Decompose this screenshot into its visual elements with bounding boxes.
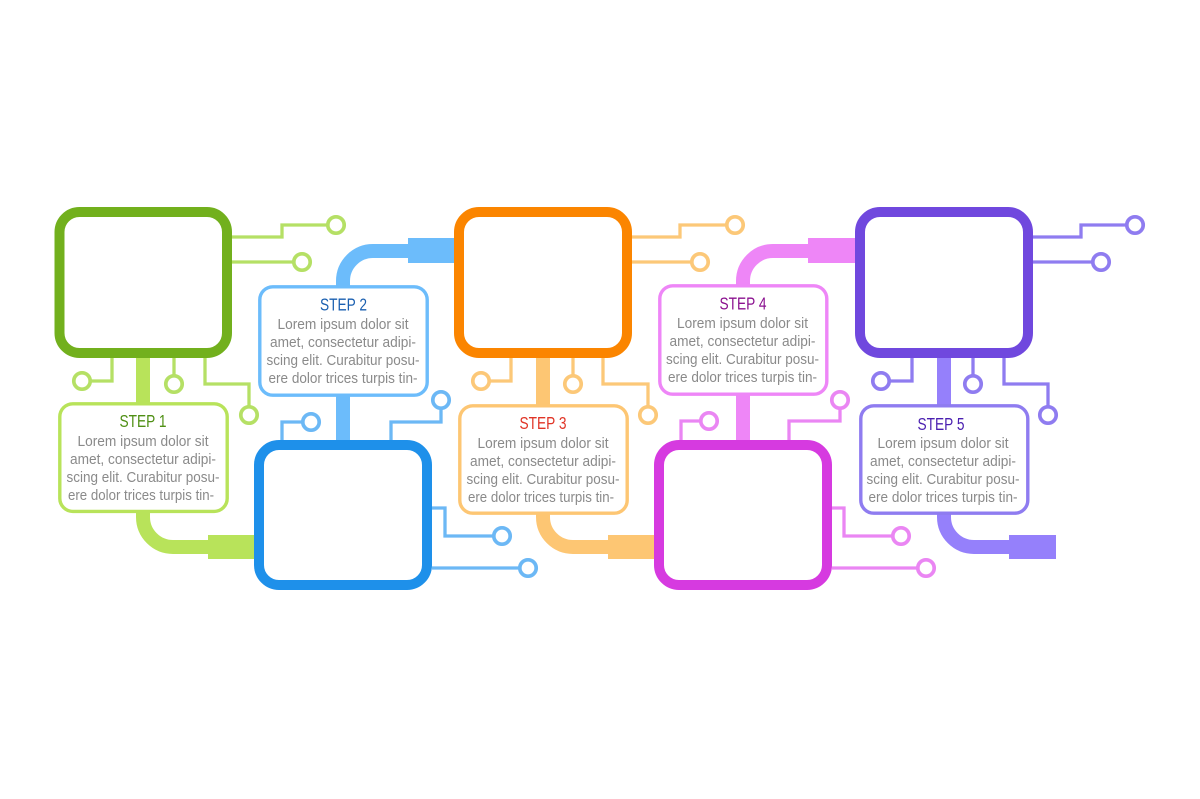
body text: step 1: amet, consectetur adipi-: [70, 452, 216, 468]
image frame: step 2: [259, 445, 427, 585]
body text: step 2: amet, consectetur adipi-: [270, 335, 416, 351]
body text: step 2: scing elit. Curabitur posu-: [266, 353, 420, 369]
text card: step 4: [660, 286, 827, 394]
heading: step 3: STEP 3: [520, 413, 566, 433]
connector: step 2 link to frame: [336, 396, 350, 442]
connector: step 1 top link: [136, 358, 150, 404]
circuit traces: step 5: [873, 217, 1143, 423]
body text: step 4: [666, 316, 819, 386]
text card: step 2: [260, 287, 427, 395]
circuit traces: step 2: [282, 392, 536, 576]
body text: step 3: ere dolor trices turpis tin-: [468, 490, 614, 506]
body text: step 4: Lorem ipsum dolor sit: [677, 316, 808, 332]
circuit traces: step 3: [473, 217, 743, 423]
text card: step 5: [861, 406, 1028, 513]
connector: step 5 cable and plug: [944, 513, 1056, 559]
body text: step 3: scing elit. Curabitur posu-: [466, 472, 620, 488]
body text: step 1: [66, 434, 220, 504]
body text: step 5: ere dolor trices turpis tin-: [868, 490, 1018, 506]
body text: step 2: [266, 317, 420, 387]
body text: step 2: Lorem ipsum dolor sit: [278, 317, 408, 333]
body text: step 3: [466, 436, 620, 506]
image frame: step 1: [60, 212, 227, 353]
body text: step 5: scing elit. Curabitur posu-: [866, 472, 1020, 488]
heading: step 2: STEP 2: [320, 294, 367, 314]
body text: step 1: Lorem ipsum dolor sit: [78, 434, 208, 450]
heading: step 1: STEP 1: [120, 411, 166, 431]
step 3 module: [459, 212, 743, 559]
image frame: step 3: [459, 212, 627, 353]
step 2 module: [259, 238, 536, 585]
body text: step 4: ere dolor trices turpis tin-: [668, 370, 817, 386]
step 1 module: [60, 212, 344, 559]
body text: step 1: scing elit. Curabitur posu-: [66, 470, 220, 486]
body text: step 3: amet, consectetur adipi-: [470, 454, 616, 470]
circuit traces: step 4: [681, 392, 934, 576]
body text: step 5: Lorem ipsum dolor sit: [878, 436, 1008, 452]
connector: step 4 link to frame: [736, 395, 750, 442]
circuit traces: step 1: [74, 217, 344, 423]
body text: step 4: scing elit. Curabitur posu-: [666, 352, 819, 368]
heading: step 5: STEP 5: [918, 414, 964, 434]
heading: step 4: STEP 4: [720, 294, 767, 314]
body text: step 1: ere dolor trices turpis tin-: [68, 488, 214, 504]
text card: step 3: [460, 406, 627, 513]
step 4 module: [659, 238, 934, 585]
body text: step 3: Lorem ipsum dolor sit: [478, 436, 608, 452]
connector: step 2 cable and plug: [343, 238, 456, 286]
connector: step 1 cable and plug: [143, 512, 256, 559]
body text: step 5: [866, 436, 1020, 506]
connector: step 3 top link: [536, 358, 550, 406]
connector: step 4 cable and plug: [743, 238, 857, 286]
step 5 module: [860, 212, 1143, 559]
connector: step 3 cable and plug: [543, 513, 656, 559]
body text: step 4: amet, consectetur adipi-: [670, 334, 816, 350]
text card: step 1: [60, 404, 227, 511]
body text: step 5: amet, consectetur adipi-: [870, 454, 1016, 470]
image frame: step 5: [860, 212, 1028, 353]
body text: step 2: ere dolor trices turpis tin-: [268, 371, 418, 387]
connector: step 5 top link: [937, 358, 951, 406]
image frame: step 4: [659, 445, 827, 585]
